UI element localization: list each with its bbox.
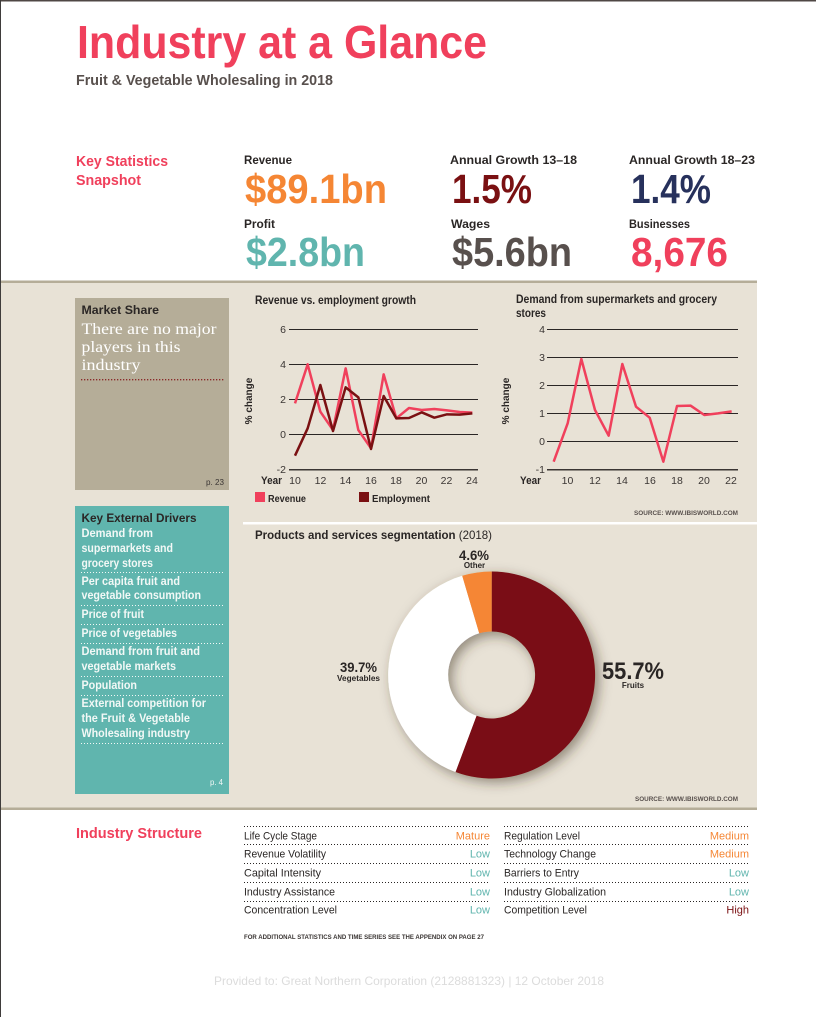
- chart: demand from supermarkets and grocery stores: Year: [520, 475, 542, 487]
- label: other: Other: [464, 561, 485, 570]
- donut chart: [388, 572, 595, 778]
- stat: businesses: 8,676: [631, 229, 728, 275]
- chart: demand from supermarkets and grocery stores: Demand from supermarkets and grocery: [516, 294, 718, 306]
- chart: revenue vs employment growth: 22: [441, 475, 452, 487]
- panel: key external drivers: Demand from: [82, 528, 153, 540]
- panel: key external drivers: the Fruit & Vegetable: [82, 713, 190, 725]
- label: fruits: Fruits: [622, 681, 645, 690]
- chart: revenue vs employment growth: [244, 295, 478, 505]
- stat: businesses: Businesses: [629, 217, 690, 231]
- heading: key statistics snapshot: [76, 154, 168, 189]
- panel: market share: industry: [82, 357, 140, 374]
- table: industry structure left: [244, 826, 490, 916]
- panel: key external drivers: vegetable markets: [82, 661, 176, 673]
- label: vegetables: Vegetables: [337, 674, 381, 683]
- chart: demand from supermarkets and grocery stores: 2: [539, 380, 545, 392]
- chart: revenue vs employment growth: Year: [261, 475, 283, 487]
- chart: revenue vs employment growth: 2: [280, 394, 286, 406]
- label: other: 4.6%: [459, 547, 490, 563]
- label: other: [459, 547, 490, 570]
- line: revenue: [295, 364, 472, 448]
- chart: revenue vs employment growth: 16: [365, 475, 377, 487]
- chart: demand from supermarkets and grocery stores: % change: [501, 377, 512, 424]
- chart: demand from supermarkets and grocery stores: 18: [671, 475, 683, 487]
- chart: demand from supermarkets and grocery stores: 4: [539, 324, 545, 336]
- stat: revenue: $89.1bn: [245, 166, 387, 212]
- chart: revenue vs employment growth: 0: [280, 429, 286, 441]
- label: fruits: 55.7%: [602, 658, 664, 685]
- chart: demand from supermarkets and grocery stores: 22: [725, 475, 737, 487]
- label: vegetables: [337, 659, 381, 683]
- watermark: Provided to: Great Northern Corporation (2128881323) | 12 October 2018: [214, 974, 604, 988]
- heading: key statistics snapshot: Key Statistics: [76, 154, 168, 170]
- panel: key external drivers: p. 4: [210, 778, 224, 787]
- panel: key external drivers: Price of vegetables: [82, 628, 177, 640]
- table: industry structure right: Competition Level: [504, 904, 587, 916]
- chart: demand from supermarkets and grocery stores: 20: [698, 475, 710, 487]
- table: industry structure left: Low: [470, 904, 490, 916]
- panel: key external drivers: Key External Drivers: [82, 511, 197, 525]
- panel: key external drivers: Population: [82, 680, 137, 692]
- chart: demand from supermarkets and grocery stores: 12: [589, 475, 601, 487]
- heading: key statistics snapshot: Snapshot: [76, 173, 141, 189]
- panel: key external drivers: External competition for: [82, 698, 206, 710]
- table: industry structure right: High: [726, 904, 749, 916]
- panel: market share: Market Share: [82, 303, 159, 317]
- panel: market share: There are no major: [82, 321, 217, 338]
- chart: demand from supermarkets and grocery stores: 14: [616, 475, 628, 487]
- footnote: FOR ADDITIONAL STATISTICS AND TIME SERIES SEE THE APPENDIX ON PAGE 27: [244, 934, 484, 941]
- table: industry structure left: Low: [470, 886, 490, 898]
- line: demand: [554, 359, 732, 462]
- chart: revenue vs employment growth: % change: [244, 377, 255, 424]
- source: SOURCE: WWW.IBISWORLD.COM: [635, 796, 738, 803]
- chart: revenue vs employment growth: 20: [416, 475, 427, 487]
- panel: market share: [75, 298, 229, 490]
- table: industry structure left: Concentration Level: [244, 904, 337, 916]
- table: industry structure left: Low: [470, 868, 490, 880]
- label: vegetables: 39.7%: [340, 659, 378, 675]
- legend: Employment: [372, 494, 431, 505]
- panel: key external drivers: grocery stores: [82, 558, 153, 570]
- chart: demand from supermarkets and grocery stores: [501, 294, 738, 517]
- legend: [255, 492, 431, 505]
- chart: demand from supermarkets and grocery stores: 16: [644, 475, 656, 487]
- line: employment: [295, 385, 472, 456]
- table: industry structure left: Capital Intensity: [244, 868, 321, 880]
- table: industry structure right: Medium: [710, 830, 749, 842]
- table: industry structure right: Technology Change: [504, 848, 596, 860]
- table: industry structure right: Medium: [710, 848, 749, 860]
- chart: demand from supermarkets and grocery stores: stores: [516, 308, 546, 320]
- stat: annual growth 18-23: 1.4%: [631, 166, 711, 212]
- stat: wages: $5.6bn: [452, 229, 572, 275]
- stat: annual growth 18-23: [629, 153, 755, 212]
- panel: key external drivers: supermarkets and: [82, 543, 173, 555]
- chart: revenue vs employment growth: -2: [277, 464, 286, 476]
- chart: demand from supermarkets and grocery stores: 3: [539, 352, 545, 364]
- chart: revenue vs employment growth: 12: [315, 475, 326, 487]
- table: industry structure right: Barriers to Entry: [504, 868, 579, 880]
- table: industry structure right: [504, 826, 749, 916]
- heading: industry structure: Industry Structure: [76, 825, 202, 842]
- title: Industry at a Glance: [77, 16, 487, 68]
- stat: revenue: Revenue: [244, 153, 292, 167]
- chart: revenue vs employment growth: 14: [340, 475, 351, 487]
- table: industry structure left: Revenue Volatility: [244, 848, 326, 860]
- stat: annual growth 13-18: 1.5%: [452, 166, 532, 212]
- chart: revenue vs employment growth: Revenue vs. employment growth: [255, 295, 416, 307]
- stat: wages: Wages: [451, 217, 490, 231]
- chart: products and services segmentation: [255, 528, 738, 803]
- panel: key external drivers: Per capita fruit and: [82, 576, 180, 588]
- panel: key external drivers: Demand from fruit and: [82, 646, 200, 658]
- stat: annual growth 13-18: [450, 153, 577, 212]
- stat: annual growth 18-23: Annual Growth 18–23: [629, 153, 755, 167]
- table: industry structure right: Low: [729, 868, 749, 880]
- panel: market share: p. 23: [206, 478, 225, 487]
- table: industry structure right: Low: [729, 886, 749, 898]
- chart: demand from supermarkets and grocery stores: -1: [536, 464, 545, 476]
- stat: profit: $2.8bn: [246, 229, 365, 275]
- table: industry structure left: Mature: [456, 830, 490, 842]
- table: industry structure left: Life Cycle Stage: [244, 830, 317, 842]
- heading: segmentation: Products and services segmentation (2018): [255, 528, 492, 542]
- panel: market share: players in this: [82, 339, 180, 356]
- panel: key external drivers: [75, 506, 229, 794]
- table: industry structure left: Industry Assistance: [244, 886, 335, 898]
- subtitle: Fruit & Vegetable Wholesaling in 2018: [76, 72, 333, 89]
- chart: demand from supermarkets and grocery stores: 1: [539, 408, 545, 420]
- legend: Revenue: [268, 494, 306, 505]
- chart: revenue vs employment growth: 10: [289, 475, 301, 487]
- chart: demand from supermarkets and grocery stores: 0: [539, 436, 545, 448]
- chart: revenue vs employment growth: 24: [466, 475, 478, 487]
- table: industry structure right: Industry Globalization: [504, 886, 606, 898]
- panel: key external drivers: vegetable consumption: [82, 590, 201, 602]
- panel: key statistics: [244, 153, 755, 275]
- panel: key external drivers: Price of fruit: [82, 609, 144, 621]
- chart: revenue vs employment growth: 4: [280, 359, 286, 371]
- chart: revenue vs employment growth: 18: [390, 475, 402, 487]
- chart: demand from supermarkets and grocery stores: 10: [562, 475, 573, 487]
- table: industry structure right: Regulation Level: [504, 830, 580, 842]
- chart: revenue vs employment growth: 6: [280, 324, 286, 336]
- stat: profit: Profit: [244, 217, 275, 231]
- table: industry structure left: Low: [470, 848, 490, 860]
- panel: key external drivers: Wholesaling industry: [82, 728, 191, 740]
- source: SOURCE: WWW.IBISWORLD.COM: [634, 510, 738, 517]
- stat: annual growth 13-18: Annual Growth 13–18: [450, 153, 577, 167]
